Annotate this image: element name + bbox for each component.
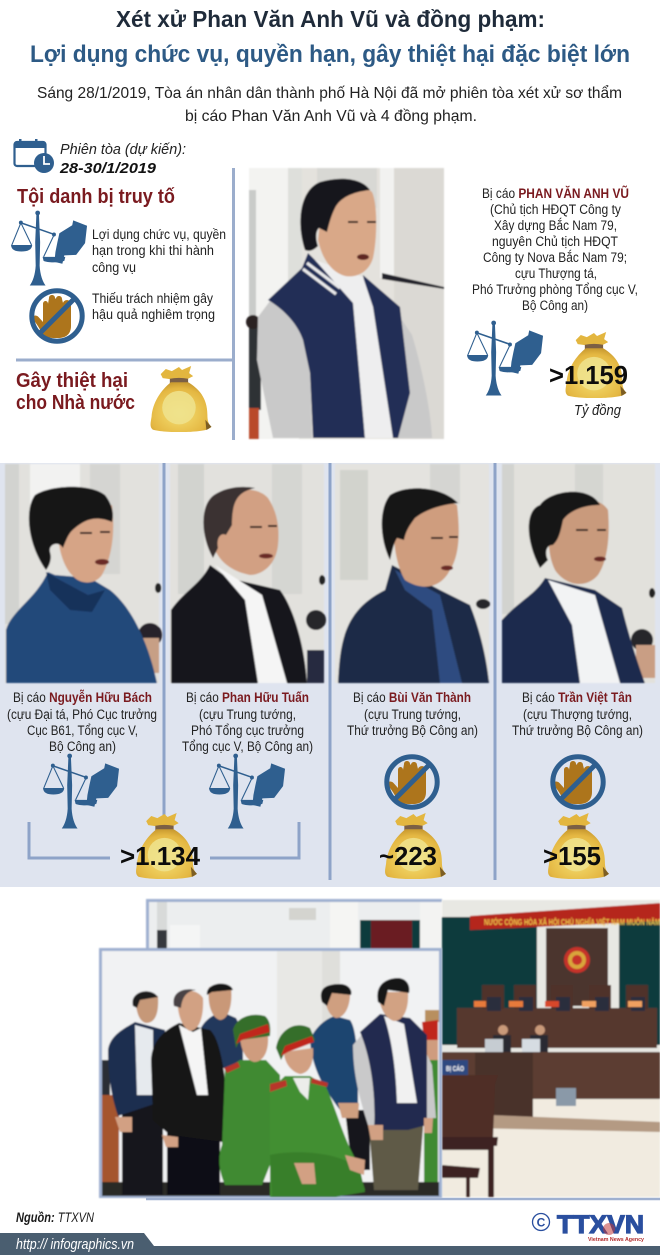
money: Bùi Văn Thành: [379, 813, 446, 879]
heading: charges: Tội danh bị truy tố: [17, 186, 175, 208]
money: Phan Văn Anh Vũ: Tỷ đồng: [574, 402, 622, 419]
column dividers: [164, 463, 495, 880]
photo: Trần Việt Tân: [502, 464, 655, 683]
icon: stop hand: [32, 291, 82, 341]
money: Phan Văn Anh Vũ: [549, 332, 628, 419]
defendant: white hair: [151, 989, 228, 1195]
defendant text: Nguyễn Hữu Bách: Cục B61, Tổng cục V,: [27, 723, 138, 738]
heading: damage: Gây thiệt hại: [16, 370, 128, 392]
icon: calendar clock: [14, 139, 54, 173]
defendant text: Phan Hữu Tuấn: (cựu Trung tướng,: [199, 707, 296, 722]
charge 1 text: hạn trong khi thi hành: [92, 243, 214, 258]
charge 1 text: công vụ: [92, 260, 136, 275]
defendant text: Trần Việt Tân: (cựu Thượng tướng,: [523, 707, 632, 722]
defendant text: Phan Văn Anh Vũ: Phó Trưởng phòng Tổng cục V,: [472, 282, 638, 297]
charge 1 text: Lợi dụng chức vụ, quyền: [92, 227, 226, 242]
defendant text: Phan Văn Anh Vũ: [472, 186, 638, 313]
defendant text: Phan Văn Anh Vũ: (Chủ tịch HĐQT Công ty: [490, 202, 621, 217]
intro text: [37, 84, 622, 125]
hearing date: 28-30/1/2019: [59, 160, 157, 177]
charge 2 text: [92, 291, 215, 322]
defendant: Phan Văn Anh Vũ: [353, 978, 436, 1190]
defendant text: Bùi Văn Thành: (cựu Trung tướng,: [364, 707, 461, 722]
defendant text: Phan Văn Anh Vũ: Xây dựng Bắc Nam 79,: [494, 218, 617, 233]
charge 2 text: Thiếu trách nhiệm gây: [92, 291, 213, 306]
photo: courtroom: BỊ CÁO: [446, 1064, 464, 1073]
defendant text: Bùi Văn Thành: Bị cáo Bùi Văn Thành: [353, 690, 471, 705]
defendant text: Phan Hữu Tuấn: Tổng cục V, Bộ Công an): [182, 739, 313, 754]
defendant text: Nguyễn Hữu Bách: Bộ Công an): [49, 739, 116, 754]
footer bar: [0, 1233, 660, 1255]
bottom frame strip: [146, 1198, 660, 1200]
intro text: bị cáo Phan Văn Anh Vũ và 4 đồng phạm.: [185, 108, 477, 125]
icon: money bag: [151, 366, 211, 432]
soldier: back: [219, 1015, 280, 1185]
logo: TTXVN: [532, 1211, 645, 1243]
soldier: front: [270, 1025, 365, 1197]
logo: TTXVN: Vietnam News Agency: [588, 1237, 645, 1243]
photo: defendants standing: [99, 948, 442, 1198]
defendant text: Trần Việt Tân: Thứ trưởng Bộ Công an): [512, 723, 643, 738]
defendant text: Phan Hữu Tuấn: Phó Tổng cục trưởng: [191, 723, 304, 738]
money: shared amount: [120, 813, 201, 879]
defendant: far left: [108, 991, 166, 1195]
icon: stop hand: [553, 757, 603, 807]
photo: Phan Văn Anh Vũ: [246, 168, 444, 439]
title: Lợi dụng chức vụ, quyền hạn, gây thiệt hại đặc biệt lớn: [30, 41, 630, 68]
defendant text: Nguyễn Hữu Bách: [7, 690, 157, 754]
logo: TTXVN: TTXVN: [557, 1211, 644, 1239]
intro text: Sáng 28/1/2019, Tòa án nhân dân thành phố Hà Nội đã mở phiên tòa xét xử sơ thẩm: [37, 84, 622, 102]
defendant text: Phan Hữu Tuấn: Bị cáo Phan Hữu Tuấn: [186, 690, 309, 705]
defendant text: Phan Văn Anh Vũ: nguyên Chủ tịch HĐQT: [492, 234, 618, 249]
defendant text: Bùi Văn Thành: Thứ trưởng Bộ Công an): [347, 723, 478, 738]
money: Trần Việt Tân: >155: [543, 841, 601, 871]
divider: left panel frame: [16, 168, 234, 440]
photo: courtroom back frame: [146, 899, 442, 951]
bracket joining two defendants: [29, 822, 299, 858]
money: Bùi Văn Thành: ~223: [379, 841, 437, 871]
defendant text: Phan Văn Anh Vũ: cựu Thượng tá,: [515, 266, 597, 281]
footer bar: http:// infographics.vn: [16, 1237, 134, 1253]
defendant text: Phan Hữu Tuấn: [182, 690, 313, 754]
defendant text: Trần Việt Tân: Bị cáo Trần Việt Tân: [522, 690, 632, 705]
panel: co-defendants: [0, 463, 660, 887]
charge 2 text: hậu quả nghiêm trọng: [92, 307, 215, 322]
money: Phan Văn Anh Vũ: >1.159: [549, 360, 628, 390]
heading: damage: cho Nhà nước: [16, 392, 135, 414]
heading: damage: [16, 370, 135, 414]
defendant text: Nguyễn Hữu Bách: (cựu Đại tá, Phó Cục trưởng: [7, 707, 157, 722]
money: Trần Việt Tân: [543, 813, 609, 879]
defendant text: Bùi Văn Thành: [347, 690, 478, 738]
defendant text: Trần Việt Tân: [512, 690, 643, 738]
logo: TTXVN: C: [537, 1216, 546, 1230]
defendant text: Phan Văn Anh Vũ: Công ty Nova Bắc Nam 79;: [483, 250, 627, 265]
icon: scale and hand: [467, 321, 543, 396]
title: Xét xử Phan Văn Anh Vũ và đồng phạm:: [116, 6, 545, 32]
photo: Bùi Văn Thành: [335, 464, 490, 683]
right soldier: [422, 1020, 438, 1182]
photo: courtroom: [442, 900, 660, 1197]
source: Nguồn: TTXVN: [16, 1209, 95, 1225]
charge 1 text: [92, 227, 226, 275]
icon: scale and hand: [43, 754, 119, 829]
defendant text: Phan Văn Anh Vũ: Bị cáo PHAN VĂN ANH VŨ: [482, 186, 629, 201]
title: [30, 6, 630, 68]
icon: scale and hand: [11, 211, 87, 286]
hearing date: [59, 141, 186, 177]
defendant text: Nguyễn Hữu Bách: Bị cáo Nguyễn Hữu Bách: [13, 690, 152, 705]
photo: Phan Hữu Tuấn: [170, 464, 326, 683]
defendant text: Phan Văn Anh Vũ: Bộ Công an): [522, 298, 588, 313]
icon: scale and hand: [209, 754, 285, 829]
defendant: blue jacket: [310, 984, 370, 1170]
defendant: third: [200, 984, 243, 1068]
hearing date: Phiên tòa (dự kiến):: [60, 141, 186, 158]
icon: stop hand: [387, 757, 437, 807]
photo: Nguyễn Hữu Bách: [5, 464, 162, 683]
money: shared amount: >1.134: [120, 841, 201, 871]
